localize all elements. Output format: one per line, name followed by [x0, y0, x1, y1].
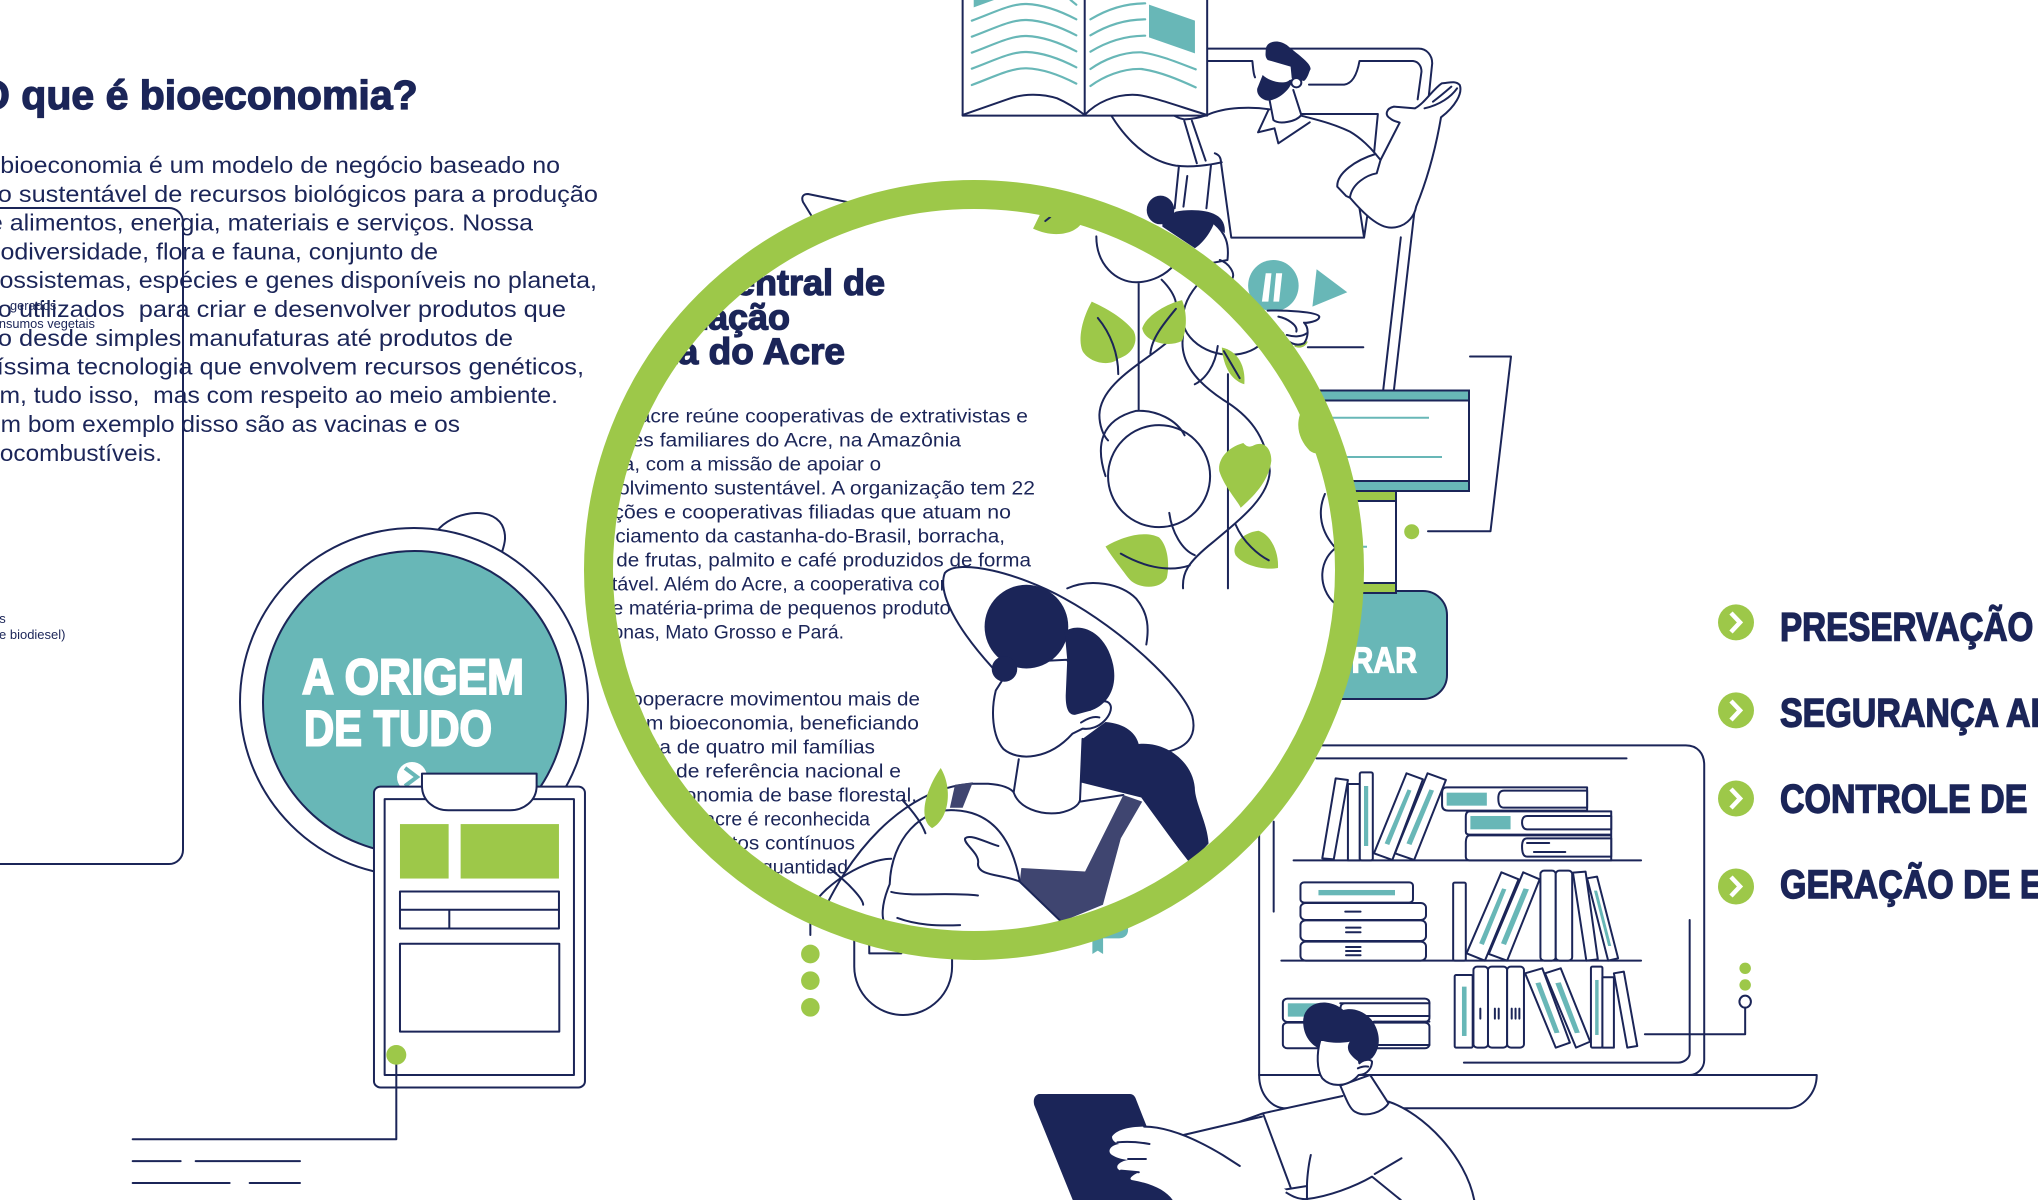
held seedling pot [1038, 900, 1059, 921]
illustration: monitor [1200, 390, 1469, 593]
text block: about Cooperacre: polpa de frutas, palmito e café produzidos de forma [560, 550, 1031, 572]
illustration: man presenting with open book [963, 0, 1460, 390]
text block: small residual labels: gerados [10, 298, 56, 313]
text block: about Cooperacre: Amazonas, Mato Grosso e Pará. [563, 622, 844, 644]
text block: about Cooperacre: beneficiamento da castanha-do-Brasil, borracha, [559, 526, 1005, 548]
illustration: hanging plant and woman [804, 211, 1340, 956]
presentation board outline [1207, 49, 1432, 390]
pointing hand [1268, 310, 1363, 348]
leaf veins [1045, 217, 1340, 604]
laptop base [1259, 1075, 1817, 1108]
text block: Cooperacre impact: A Cooperacre movimentou mais de [598, 690, 920, 710]
text block: small residual labels [0, 298, 95, 642]
man face [1263, 60, 1304, 82]
man torso with tablet [1240, 1003, 1474, 1200]
heading: Cooperativa Central de Comercialização Extrativista do Acre [677, 268, 884, 365]
illustration: laptop with bookshelf [1240, 745, 1817, 1200]
heading: Cooperativa Central de Comercialização Extrativista do Acre: Comercialização [506, 296, 790, 338]
seedling leaf [924, 768, 948, 828]
hair bun [985, 585, 1068, 682]
man raised arm [1337, 82, 1460, 228]
text block: Cooperacre impact: milhões em bioeconomia, beneficiando [556, 714, 919, 734]
man neck and collar [1270, 90, 1301, 122]
icon: clock knob [437, 513, 505, 552]
form box [400, 944, 559, 1032]
pot behind ring and dots [801, 920, 1128, 1017]
books: top shelf [1322, 772, 1611, 860]
text block: Cooperacre impact: em qualidade e quantidade [622, 858, 859, 878]
clipboard clip [422, 774, 537, 810]
text block: about Cooperacre: associações e cooperativas filiadas que atuam no [541, 502, 1011, 524]
connector bracket [1428, 356, 1511, 531]
icon: chevron button [397, 762, 427, 792]
panel: green ring [598, 194, 1350, 946]
plant big circle [1108, 425, 1210, 527]
button: entrar [1180, 591, 1447, 699]
heading: A ORIGEM DE TUDO [302, 649, 524, 756]
text block: Cooperacre impact: pelos investimentos contínuos [577, 834, 855, 854]
face [993, 660, 1111, 757]
circle outer [240, 528, 588, 876]
green dot [386, 1045, 406, 1065]
text block: about Cooperacre: também de matéria-prima de pequenos produtores de [522, 598, 1007, 620]
panel: clipped circle content [613, 215, 1334, 926]
green dots [801, 945, 820, 1017]
pot outline [810, 922, 952, 1015]
button: entrar: ENTRAR [1291, 641, 1417, 681]
panel: rounded frame at left [0, 208, 183, 864]
clipboard sheet [385, 799, 574, 1075]
icon: green dot [1404, 524, 1419, 539]
icon: pause button [1248, 260, 1299, 311]
man hair [1266, 41, 1311, 81]
connector line [133, 1055, 396, 1139]
hat brim [943, 567, 1194, 753]
panel: white disc of central circle [598, 194, 1350, 946]
open book [963, 0, 1207, 116]
icon: tablet and hand [1034, 1094, 1287, 1200]
panel: A origem de tudo [240, 513, 588, 876]
man beard [1257, 75, 1293, 101]
circle teal [263, 551, 566, 854]
text block: Cooperacre impact: modelo de referência nacional e [601, 762, 901, 782]
panel: clipboard [133, 774, 585, 1183]
text block: Cooperacre impact: bioeconomia de base florestal. [635, 786, 917, 806]
text block: about Cooperacre: A Cooperacre reúne cooperativas de extrativistas e [551, 406, 1028, 428]
teal book corner [1030, 920, 1128, 954]
green blocks [400, 824, 559, 879]
heading: A ORIGEM DE TUDO: DE TUDO [304, 700, 492, 756]
text block: about Cooperacre [613, 408, 1034, 641]
text block: bioeconomy definition [0, 152, 598, 466]
text block: about Cooperacre: sustentável. Além do Acre, a cooperativa compra [553, 574, 985, 596]
books: middle shelf [1300, 871, 1618, 961]
text block: small residual labels: e biodiesel) [0, 627, 66, 642]
plant vines and pots [1096, 236, 1270, 588]
caption lines [133, 1161, 300, 1183]
hair front [1065, 628, 1114, 715]
heading: Cooperativa Central de Comercialização Extrativista do Acre: Cooperativa Central de [491, 262, 885, 303]
shelves [1281, 860, 1641, 961]
form table [400, 891, 559, 929]
laptop screen frame [1259, 745, 1704, 1075]
hat crown [1067, 583, 1148, 644]
torso [846, 840, 1188, 874]
overalls [950, 782, 1142, 923]
decorative shape at ring top-left [802, 194, 847, 215]
text block: Cooperacre impact: cerca de quatro mil famílias [620, 738, 875, 758]
man shirt lines [1104, 97, 1376, 238]
books: bottom shelf [1283, 967, 1637, 1048]
plant leaves [1033, 211, 1340, 587]
woman with bun [1147, 196, 1233, 278]
list: bioeconomy benefits [1718, 603, 2038, 907]
heading: A ORIGEM DE TUDO: A ORIGEM [302, 649, 524, 705]
text block: about Cooperacre: desenvolvimento sustentável. A organização tem 22 [550, 478, 1035, 500]
clipboard board [374, 787, 585, 1087]
man ear [1291, 78, 1301, 87]
text block: Cooperacre impact [636, 692, 920, 874]
connector and status dots [1645, 963, 1751, 1034]
icon: play triangle [1312, 269, 1347, 307]
heading: Cooperativa Central de Comercialização Extrativista do Acre: Extrativista do Acre [499, 331, 845, 372]
text block: Cooperacre impact: A Cooperacre é reconhecida [623, 810, 870, 830]
text block: about Cooperacre: brasileira, com a missão de apoiar o [551, 454, 881, 476]
ponytail [1080, 722, 1209, 864]
man torso [1176, 108, 1376, 238]
text block: about Cooperacre: produtores familiares do Acre, na Amazônia [553, 430, 961, 452]
neck [1014, 739, 1083, 813]
